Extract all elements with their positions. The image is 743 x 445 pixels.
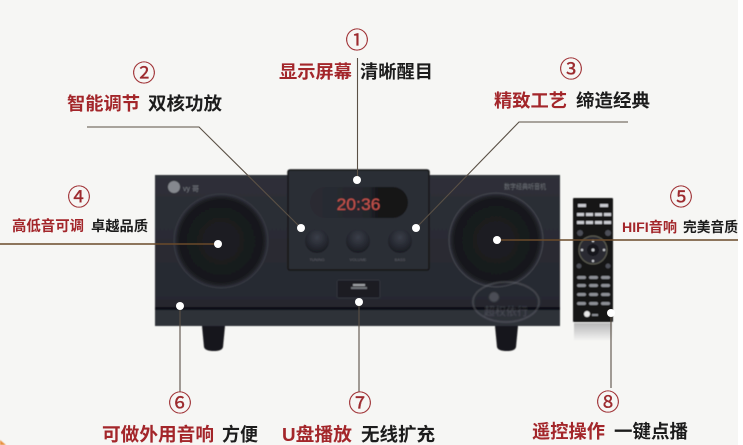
- watermark: 超权依行: [484, 304, 528, 318]
- leader line 3: [416, 122, 628, 228]
- speaker unit: [0, 170, 613, 445]
- main cabinet: [155, 175, 560, 326]
- remote navigation ring: [579, 236, 607, 264]
- callout 5: HiFi: 完美音质: [683, 219, 738, 235]
- callout 8: remote operation: ⑧: [596, 389, 620, 415]
- corner fleck: [0, 440, 6, 445]
- leader line 5: [497, 239, 738, 241]
- leader line 8: [610, 313, 612, 388]
- callout 8: remote operation: 遥控操作: [532, 421, 605, 442]
- callout 3: craftsmanship: 精致工艺: [494, 91, 567, 111]
- callout 6: external speaker: ⑥: [168, 390, 192, 416]
- left foot: [202, 326, 225, 351]
- callout 6: external speaker: 可做外用音响: [102, 424, 214, 445]
- left speaker: [174, 194, 268, 288]
- callout 5: HiFi: ⑤: [670, 184, 692, 210]
- LED clock: 20:36: [336, 195, 380, 214]
- leader line 4: [0, 243, 218, 245]
- leader line 7: [358, 302, 360, 392]
- USB port: [337, 280, 380, 298]
- display window: [310, 187, 408, 218]
- knob: bass: BASS: [395, 257, 406, 262]
- remote logo: [584, 311, 598, 317]
- callout 1: display: [279, 27, 433, 82]
- leader line 6: [179, 306, 181, 392]
- callout 8: remote operation: 一键点播: [614, 421, 688, 442]
- callout 1: display: 显示屏幕: [279, 62, 352, 82]
- leader line 2: [87, 127, 301, 228]
- knob: tuning: TUNING: [309, 257, 325, 262]
- callout 5: HiFi: [622, 184, 738, 235]
- callout 6: external speaker: [102, 390, 258, 445]
- knob: tuning: [305, 229, 329, 262]
- callout 6: external speaker: 方便: [222, 424, 258, 445]
- callout 7: USB playback: [282, 390, 435, 445]
- callout dots: [176, 176, 615, 317]
- remote top buttons: [577, 204, 611, 236]
- brand logo: vy 哥: [183, 185, 199, 193]
- right speaker: [449, 193, 543, 287]
- callout 7: USB playback: ⑦: [348, 390, 372, 416]
- callout 2: smart control: 智能调节: [67, 93, 140, 114]
- callout 4: tone adjustment: 高低音可调: [12, 217, 84, 235]
- callout 7: USB playback: U盘播放: [282, 424, 352, 445]
- knob: volume: [346, 229, 370, 262]
- watermark: [473, 282, 539, 322]
- callout 3: craftsmanship: 缔造经典: [576, 90, 650, 111]
- brand logo: [168, 181, 199, 193]
- callout 2: smart control: [67, 60, 222, 114]
- control panel: [288, 170, 429, 270]
- remote reflection: [574, 323, 612, 341]
- remote lower buttons: [576, 264, 610, 305]
- callout 2: smart control: 双核功放: [148, 93, 222, 114]
- model label: 数字经典听音机: [504, 182, 546, 191]
- remote control: [573, 198, 613, 341]
- right foot: [495, 326, 518, 351]
- callout 2: smart control: ②: [132, 60, 156, 86]
- knob: bass: [388, 229, 412, 262]
- callout 4: tone adjustment: ④: [68, 184, 90, 210]
- callout 1: display: ①: [346, 27, 368, 53]
- callout 3: craftsmanship: [494, 56, 650, 111]
- callout 5: HiFi: HIFI音响: [622, 219, 677, 235]
- knob: volume: VOLUME: [350, 257, 367, 262]
- callout 7: USB playback: 无线扩充: [361, 424, 435, 445]
- callout 8: remote operation: [532, 389, 688, 442]
- callout 1: display: 清晰醒目: [360, 62, 433, 82]
- leader line 1: [356, 58, 358, 180]
- callout 4: tone adjustment: 卓越品质: [91, 218, 148, 234]
- callout 3: craftsmanship: ③: [560, 56, 582, 82]
- callout 4: tone adjustment: [12, 184, 148, 235]
